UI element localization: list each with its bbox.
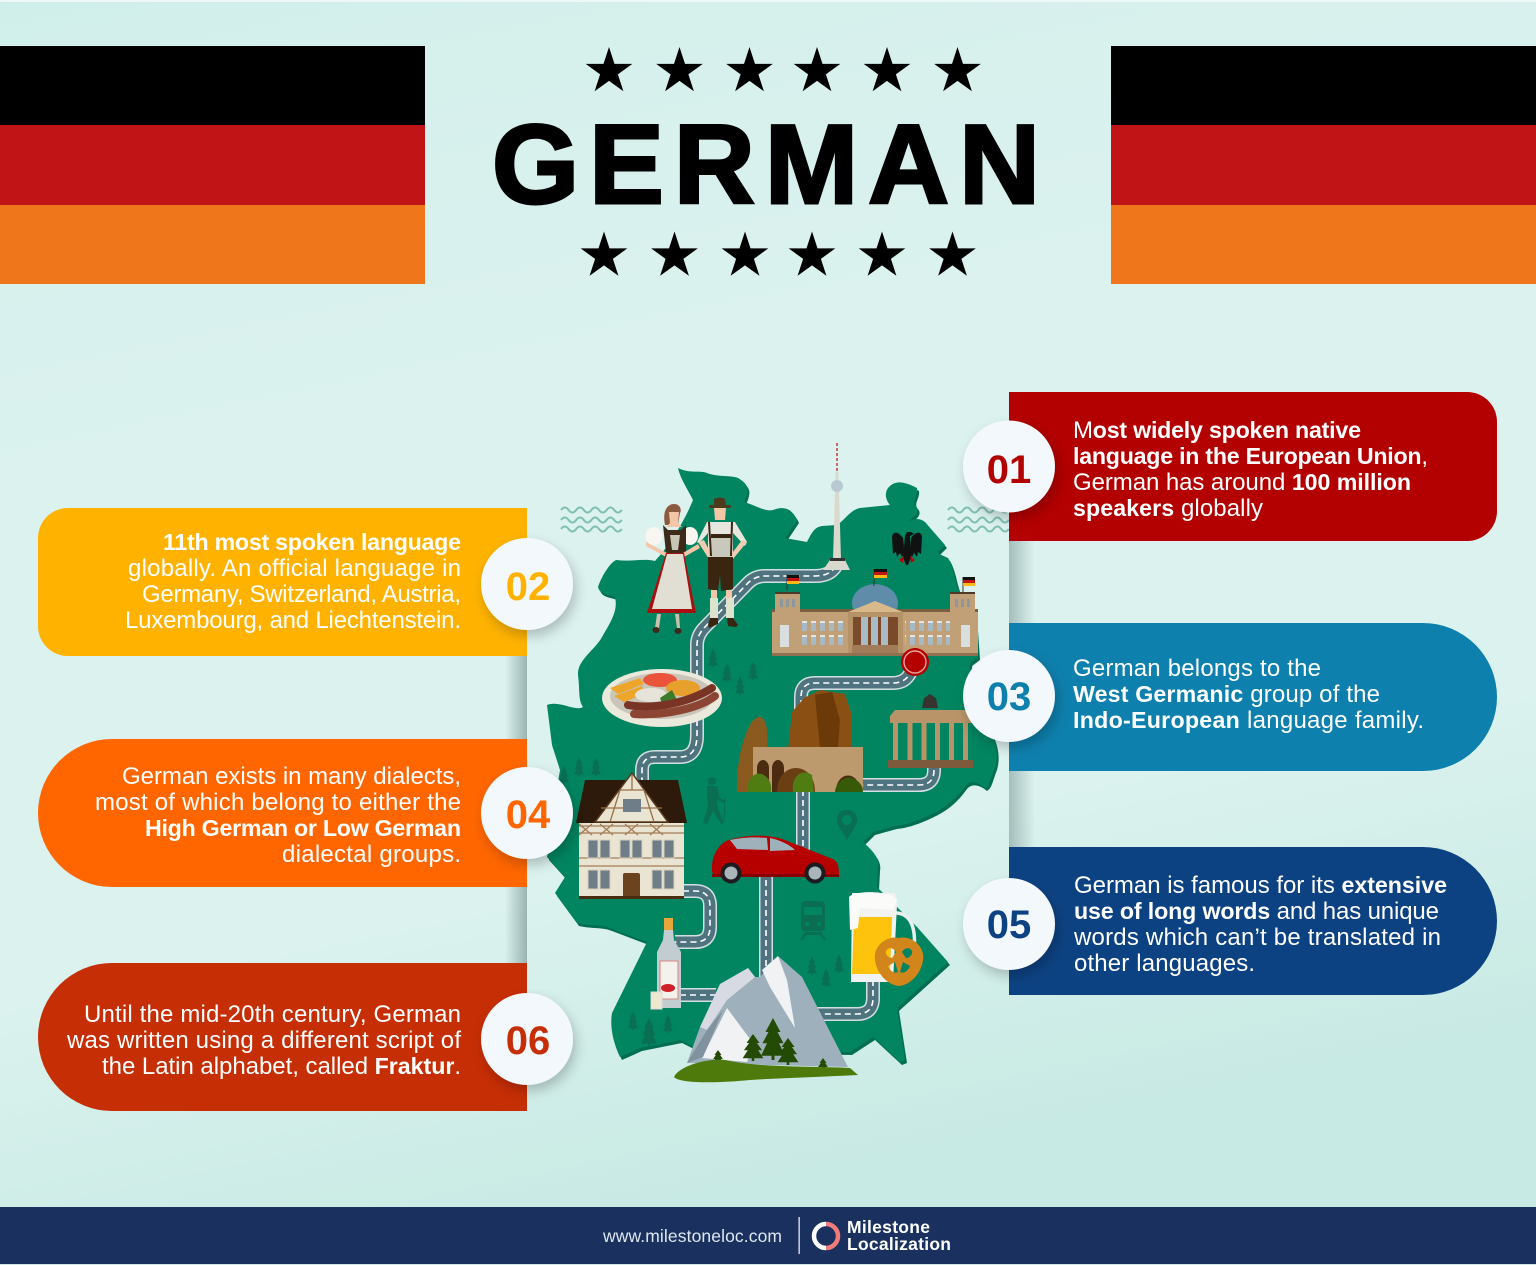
text 02 <box>125 529 461 634</box>
text 03: West Germanic group of the <box>1073 681 1380 708</box>
number badge 06: 06 <box>506 1019 550 1063</box>
icon: hiker <box>703 777 725 824</box>
number badge 02: 02 <box>506 565 550 609</box>
footer bar <box>0 1207 1536 1265</box>
text 04: most of which belong to either the <box>95 789 461 816</box>
brand name: Milestone <box>847 1217 930 1237</box>
half-timbered house <box>576 773 687 899</box>
right flag <box>1111 46 1536 284</box>
icon: train <box>800 901 827 940</box>
text 05: other languages. <box>1074 950 1255 977</box>
text 05: German is famous for its extensive <box>1074 872 1447 899</box>
brand name <box>847 1217 951 1254</box>
mountain <box>674 956 858 1082</box>
text 04: German exists in many dialects, <box>122 763 461 790</box>
panel 05 <box>1009 847 1497 995</box>
text 02: Luxembourg, and Liechtenstein. <box>125 607 461 634</box>
left flag <box>0 46 425 284</box>
waves right <box>948 508 1009 532</box>
TV tower <box>823 443 850 570</box>
number badge 03: 03 <box>987 675 1031 719</box>
text 03: German belongs to the <box>1073 655 1321 682</box>
Brandenburg gate <box>888 694 973 768</box>
text 05: words which can’t be translated in <box>1073 924 1441 951</box>
waves left <box>561 508 622 532</box>
text 04: dialectal groups. <box>282 841 461 868</box>
text 04 <box>95 763 461 868</box>
number badge 05: 05 <box>987 903 1031 947</box>
trees <box>559 649 844 1046</box>
plate of sausages <box>602 669 722 727</box>
text 02: globally. An official language in <box>128 555 461 582</box>
icon: location pin <box>837 810 857 840</box>
beer mug and pretzel <box>849 892 923 986</box>
map of Germany with landmarks <box>547 443 1009 1082</box>
text 04: High German or Low German <box>145 815 461 841</box>
man in lederhosen <box>697 498 747 628</box>
panel 03 <box>1009 623 1497 771</box>
red map pin <box>901 648 929 676</box>
text 05 <box>1073 872 1447 977</box>
Reichstag building <box>772 569 978 656</box>
title: GERMAN <box>492 102 1040 227</box>
woman in dirndl <box>646 504 700 634</box>
red car <box>712 836 839 884</box>
roads <box>642 566 934 1014</box>
map shape <box>547 468 999 1065</box>
text 01: Most widely spoken native <box>1073 417 1361 444</box>
number badge 01: 01 <box>987 448 1031 492</box>
brand name: Localization <box>847 1234 951 1254</box>
icon: eagle <box>892 532 922 565</box>
text 01 <box>1073 417 1428 522</box>
bottle and shot glass <box>651 918 681 1009</box>
number badge 04: 04 <box>506 793 551 837</box>
stars top row <box>586 47 981 91</box>
rocks and bridge <box>737 690 863 792</box>
logo <box>814 1224 838 1248</box>
text 02: Germany, Switzerland, Austria, <box>142 581 461 608</box>
number badge 06 <box>481 993 573 1085</box>
text 02: 11th most spoken language <box>163 529 461 555</box>
text 01: language in the European Union, <box>1073 443 1428 470</box>
panel shadows <box>505 541 1035 963</box>
text 06: Until the mid-20th century, German <box>84 1001 461 1028</box>
panel 01 <box>1009 392 1497 541</box>
panel 04 <box>38 739 527 887</box>
text 06: was written using a different script of <box>66 1027 461 1054</box>
text 01: German has around 100 million <box>1073 469 1411 496</box>
text 03: Indo-European language family. <box>1073 707 1424 734</box>
number badge 02 <box>481 538 573 630</box>
number badge 03 <box>963 650 1055 742</box>
panel 06 <box>38 963 527 1111</box>
number badge 01 <box>963 420 1055 512</box>
stars bottom row <box>581 232 976 276</box>
number badge 04 <box>481 767 573 859</box>
number badge 05 <box>963 878 1055 970</box>
text 06 <box>66 1001 461 1080</box>
text 03 <box>1073 655 1424 734</box>
text 05: use of long words and has unique <box>1074 898 1439 925</box>
text 01: speakers globally <box>1073 495 1263 522</box>
panel 02 <box>38 508 527 656</box>
website: www.milestoneloc.com <box>602 1226 782 1246</box>
text 06: the Latin alphabet, called Fraktur. <box>102 1053 461 1080</box>
